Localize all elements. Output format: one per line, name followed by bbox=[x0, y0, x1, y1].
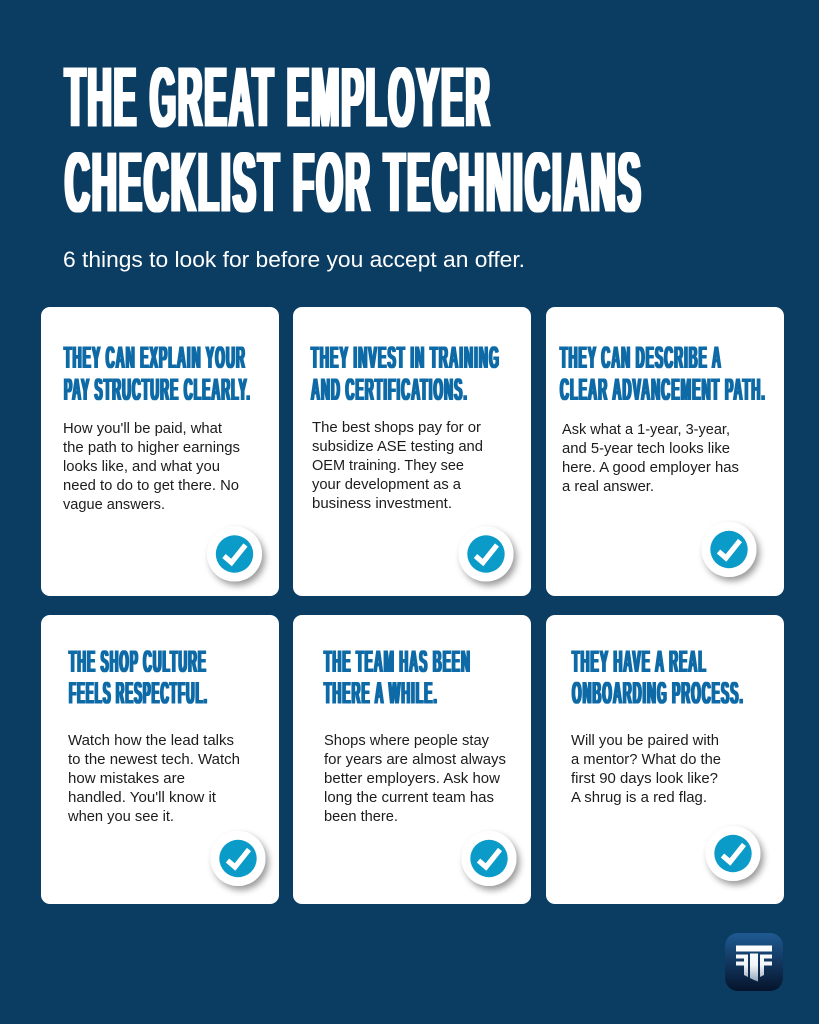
heading: pay structure bbox=[64, 339, 251, 407]
icon: check bbox=[462, 831, 516, 886]
heading: onboarding bbox=[572, 643, 744, 710]
panel: onboarding bbox=[546, 615, 784, 904]
text: training: your development as a bbox=[312, 476, 462, 493]
text: pay structure bbox=[63, 420, 240, 513]
text: culture bbox=[67, 732, 240, 825]
text: team: better employers. Ask how bbox=[324, 770, 500, 787]
title bbox=[65, 51, 643, 230]
text: team: long the current team has bbox=[324, 789, 494, 806]
panel: advancement bbox=[546, 307, 784, 596]
text: advancement: and 5-year tech looks like bbox=[562, 440, 730, 457]
text: advancement bbox=[562, 421, 739, 495]
panel: culture: FEELS RESPECTFUL. bbox=[69, 674, 208, 710]
text: onboarding: first 90 days look like? bbox=[571, 770, 718, 787]
text: team bbox=[324, 732, 506, 825]
icon: check bbox=[458, 526, 514, 582]
panel: training bbox=[293, 307, 531, 596]
icon: check bbox=[210, 831, 266, 886]
heading: culture bbox=[69, 643, 208, 710]
text: pay structure: How you'll be paid, what bbox=[63, 420, 223, 437]
text: pay structure: the path to higher earnings bbox=[63, 439, 240, 456]
text: culture: handled. You'll know it bbox=[68, 789, 217, 806]
panel: training: AND CERTIFICATIONS. bbox=[311, 371, 468, 407]
text: advancement: a real answer. bbox=[562, 478, 654, 495]
text: THEY INVEST IN TRAINING bbox=[311, 339, 500, 375]
text: training: business investment. bbox=[312, 495, 452, 512]
icon: check bbox=[706, 826, 760, 881]
text: onboarding: a mentor? What do the bbox=[571, 751, 721, 768]
icon: check bbox=[702, 522, 756, 577]
text: team: Shops where people stay bbox=[324, 732, 489, 749]
panel: culture: THE SHOP CULTURE bbox=[69, 643, 207, 679]
text: culture: how mistakes are bbox=[68, 770, 185, 787]
subtitle: 6 things to look for before you accept an offer. bbox=[63, 247, 525, 272]
text: pay structure: vague answers. bbox=[63, 496, 165, 513]
text: advancement: here. A good employer has bbox=[562, 459, 739, 476]
text: training: The best shops pay for or bbox=[312, 419, 481, 436]
icon: check bbox=[207, 526, 262, 582]
icon: logo bbox=[725, 933, 783, 991]
text: team: for years are almost always bbox=[324, 751, 506, 768]
text: pay structure: need to do to get there. No bbox=[63, 477, 239, 494]
text: pay structure: looks like, and what you bbox=[63, 458, 220, 475]
text: onboarding: Will you be paired with bbox=[571, 732, 719, 749]
panel: culture bbox=[41, 615, 279, 904]
text: THEY CAN EXPLAIN YOUR bbox=[64, 339, 246, 375]
heading: advancement bbox=[560, 339, 766, 407]
panel: pay structure bbox=[41, 307, 279, 596]
text: culture: to the newest tech. Watch bbox=[68, 751, 240, 768]
text: training bbox=[312, 419, 483, 512]
panel: team bbox=[293, 615, 531, 904]
text: advancement: Ask what a 1-year, 3-year, bbox=[562, 421, 730, 438]
text: culture: when you see it. bbox=[67, 808, 174, 825]
text: team: been there. bbox=[324, 808, 398, 825]
text: training: OEM training. They see bbox=[312, 457, 464, 474]
heading: team bbox=[324, 643, 471, 710]
text: training: subsidize ASE testing and bbox=[312, 438, 483, 455]
heading: training bbox=[311, 339, 500, 407]
panel: team: THERE A WHILE. bbox=[324, 674, 438, 710]
text: PAY STRUCTURE CLEARLY. bbox=[64, 371, 251, 407]
text: culture: Watch how the lead talks bbox=[68, 732, 234, 749]
text: onboarding: A shrug is a red flag. bbox=[571, 789, 707, 806]
text: onboarding bbox=[571, 732, 721, 806]
panel: team: THE TEAM HAS BEEN bbox=[324, 643, 471, 679]
